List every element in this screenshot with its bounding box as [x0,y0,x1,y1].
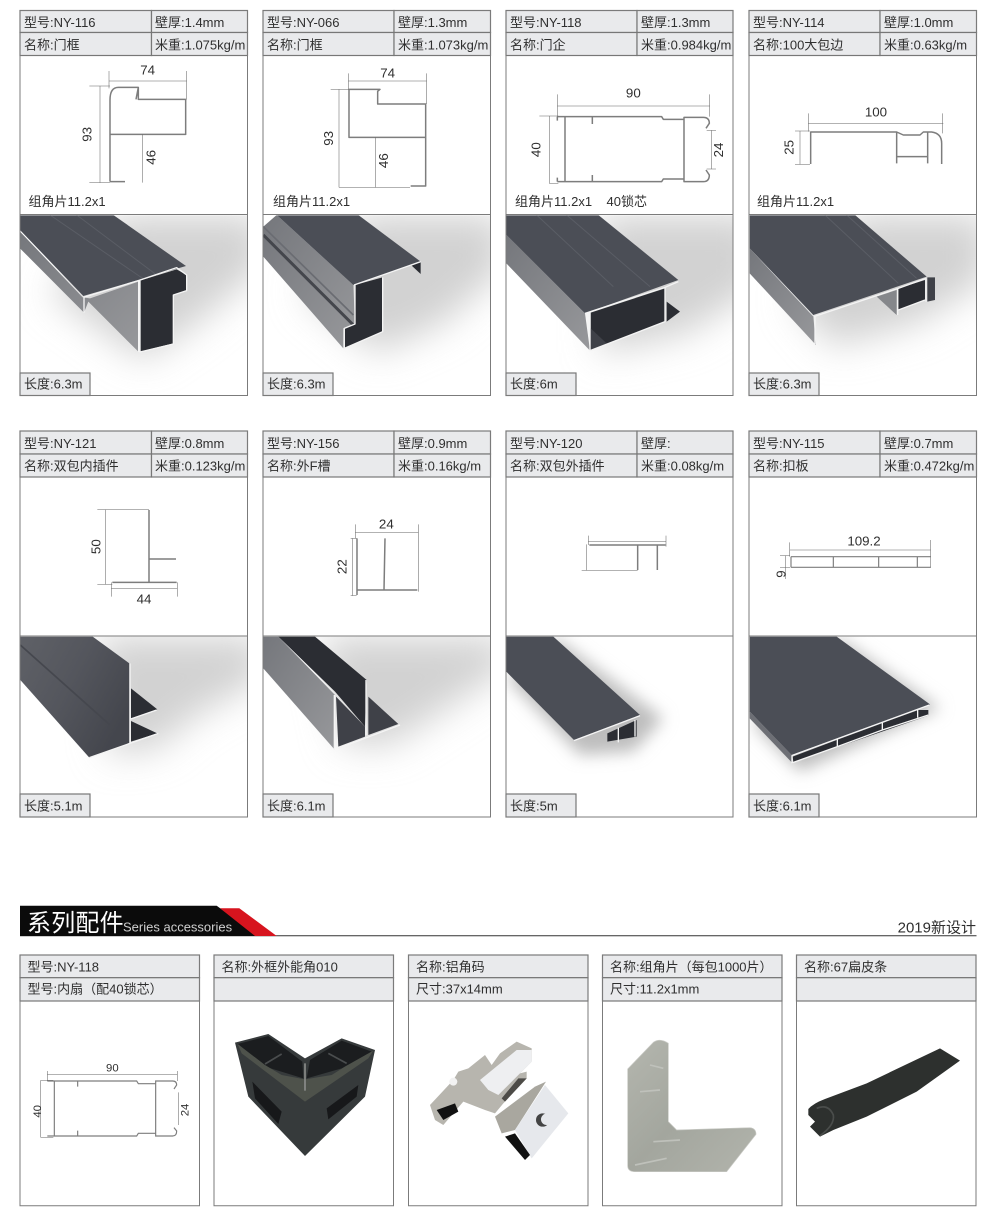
header table [20,431,248,477]
header table [749,431,976,477]
header table: 名称:扣板 [753,458,809,474]
panel: aluminium corner code [408,955,588,1206]
section heading: series accessories [20,906,976,937]
photo: black plastic corner [235,1034,375,1156]
header table: 名称:双包外插件 [510,458,605,474]
header table: 米重:0.63kg/m [884,38,967,52]
panel: NY-156 outer F channel [263,431,507,817]
panel: NY-116 door frame [20,10,263,396]
diagram: NY-116 cross-section: 74 [140,63,156,78]
length tab: 长度:6.3m [267,376,326,392]
length tab [506,794,576,817]
header table: 尺寸:11.2x1mm [610,982,699,996]
header table: 壁厚:0.9mm [398,436,467,451]
header table: 名称:门企 [510,38,566,52]
length tab: 长度:6m [510,376,558,392]
header table [20,10,248,56]
header table [408,955,588,1001]
header table: 型号:NY-114 [753,15,825,30]
header table: 名称:门框 [24,38,80,52]
length tab [749,373,819,396]
header table: 壁厚:1.3mm [641,15,710,30]
diagram: NY-121 cross-section: 50 [89,539,104,554]
photo: rubber strip [808,1048,960,1137]
length tab [749,794,819,817]
header table [796,955,976,1001]
diagram: NY-115 cross-section [773,534,931,579]
header table: 尺寸:37x14mm [416,982,503,996]
diagram: NY-116 cross-section: 46 [143,150,158,165]
header table [263,431,490,477]
header table: 型号:NY-115 [753,436,825,451]
diagram: NY-116 cross-section: 93 [80,127,95,142]
photo: NY-116 profile [20,215,263,360]
header table: 名称:外F槽 [267,458,331,474]
header table: 型号:NY-118 [28,960,99,974]
header table [506,431,733,477]
header table: 型号:NY-121 [24,436,96,451]
length tab [263,373,333,396]
header table [749,10,976,56]
panel: accessory NY-118 inner sash [20,955,200,1206]
diagram: NY-114 cross-section: 100 [865,104,887,119]
panel: corner plate [602,955,782,1206]
diagram: NY-118 sash cross-section: 40 [32,1105,44,1118]
diagram: NY-066 cross-section: 93 [321,131,336,146]
diagram: NY-156 cross-section: 24 [379,517,394,532]
length tab [263,794,333,817]
photo: corner bracket [430,1042,568,1160]
header table: 壁厚: [641,436,671,451]
panel: flat rubber strip 67 [796,955,976,1206]
header table: 壁厚:1.4mm [155,15,224,30]
diagram: NY-118 sash cross-section: 24 [179,1104,191,1116]
header table [263,10,490,56]
diagram: NY-121 cross-section: 44 [137,592,152,607]
panel: NY-118 door mullion: 40锁芯 [606,194,647,209]
diagram: NY-114 cross-section [781,104,943,164]
panel: NY-114 large edge cover [749,10,987,396]
diagram: NY-121 cross-section [89,510,177,607]
photo: NY-066 profile [263,215,503,353]
header table: 型号:NY-118 [510,15,582,30]
header table: 米重:1.075kg/m [155,38,245,52]
diagram: NY-118 cross-section: 90 [626,85,641,100]
header table: 名称:门框 [267,38,323,52]
photo: NY-115 profile [750,637,940,772]
header table: 米重:0.16kg/m [398,458,481,474]
note: 组角片11.2x1 [28,194,106,209]
header table: 米重:1.073kg/m [398,38,488,52]
diagram: NY-114 cross-section: 25 [781,140,796,155]
panel: NY-121 double cover insert [20,431,263,817]
diagram: NY-066 cross-section: 74 [380,65,396,80]
header table [214,955,394,1001]
panel: NY-115 cover plate [749,431,976,817]
header table: 米重:0.08kg/m [641,458,724,474]
header table: 型号:内扇（配40锁芯） [28,982,163,996]
length tab [20,373,90,396]
header table [20,955,200,1001]
length tab [506,373,576,396]
diagram: NY-118 sash cross-section: 90 [106,1063,119,1075]
diagram: NY-115 cross-section: 109.2 [847,534,881,549]
header table: 名称:组角片（每包1000片） [610,960,773,974]
diagram: NY-066 cross-section [321,65,427,187]
section heading: series accessories: Series accessories [123,920,233,934]
diagram: NY-118 sash cross-section [32,1063,191,1137]
length tab: 长度:5m [510,798,558,814]
header table: 名称:双包内插件 [24,458,119,474]
diagram: NY-118 cross-section [529,85,726,183]
header table: 壁厚:1.0mm [884,15,953,30]
header table: 名称:铝角码 [416,960,485,974]
header table: 名称:67扁皮条 [804,960,887,974]
section heading: series accessories: 系列配件 [27,910,124,937]
panel: NY-118 door mullion [506,10,760,396]
photo: NY-120 profile [506,637,663,755]
length tab: 长度:6.3m [753,376,812,392]
length tab [20,794,90,817]
header table [506,10,733,56]
length tab: 长度:6.1m [267,798,326,814]
length tab: 长度:6.1m [753,798,812,814]
header table: 壁厚:1.3mm [398,15,467,30]
header table: 壁厚:0.7mm [884,436,953,451]
label: 2019 new design: 2019新设计 [898,920,976,936]
diagram: NY-118 cross-section: 40 [529,142,544,157]
note: 组角片11.2x1 [273,194,350,209]
header table: 米重:0.123kg/m [155,458,245,474]
length tab: 长度:6.3m [24,376,83,392]
header table: 型号:NY-116 [24,15,96,30]
header table: 壁厚:0.8mm [155,436,224,451]
photo: L-shaped corner plate [628,1040,756,1172]
diagram: NY-156 cross-section: 22 [334,559,349,574]
header table: 米重:0.984kg/m [641,38,731,52]
photo: NY-121 profile [20,637,263,758]
diagram: NY-120 cross-section [582,536,666,570]
panel: outer frame corner 010 [214,955,394,1206]
photo: NY-118 profile [506,215,760,353]
length tab: 长度:5.1m [24,798,83,814]
header table: 名称:外框外能角010 [222,960,338,974]
header table: 型号:NY-156 [267,436,340,451]
diagram: NY-115 cross-section: 9 [773,570,788,578]
header table: 型号:NY-120 [510,436,582,451]
photo: NY-156 profile [263,637,507,750]
header table [602,955,782,1001]
header table: 名称:100大包边 [753,38,843,52]
header table: 米重:0.472kg/m [884,458,974,474]
photo: NY-114 profile [750,215,987,347]
diagram: NY-066 cross-section: 46 [376,153,391,168]
note: 组角片11.2x1 [515,194,592,209]
diagram: NY-118 cross-section: 24 [711,142,726,157]
note: 组角片11.2x1 [757,194,834,209]
panel: NY-120 double cover outer insert [506,431,733,817]
diagram: NY-156 cross-section [334,517,419,596]
header table: 型号:NY-066 [267,15,340,30]
diagram: NY-116 cross-section [80,63,187,183]
panel: NY-066 door frame [263,10,503,396]
